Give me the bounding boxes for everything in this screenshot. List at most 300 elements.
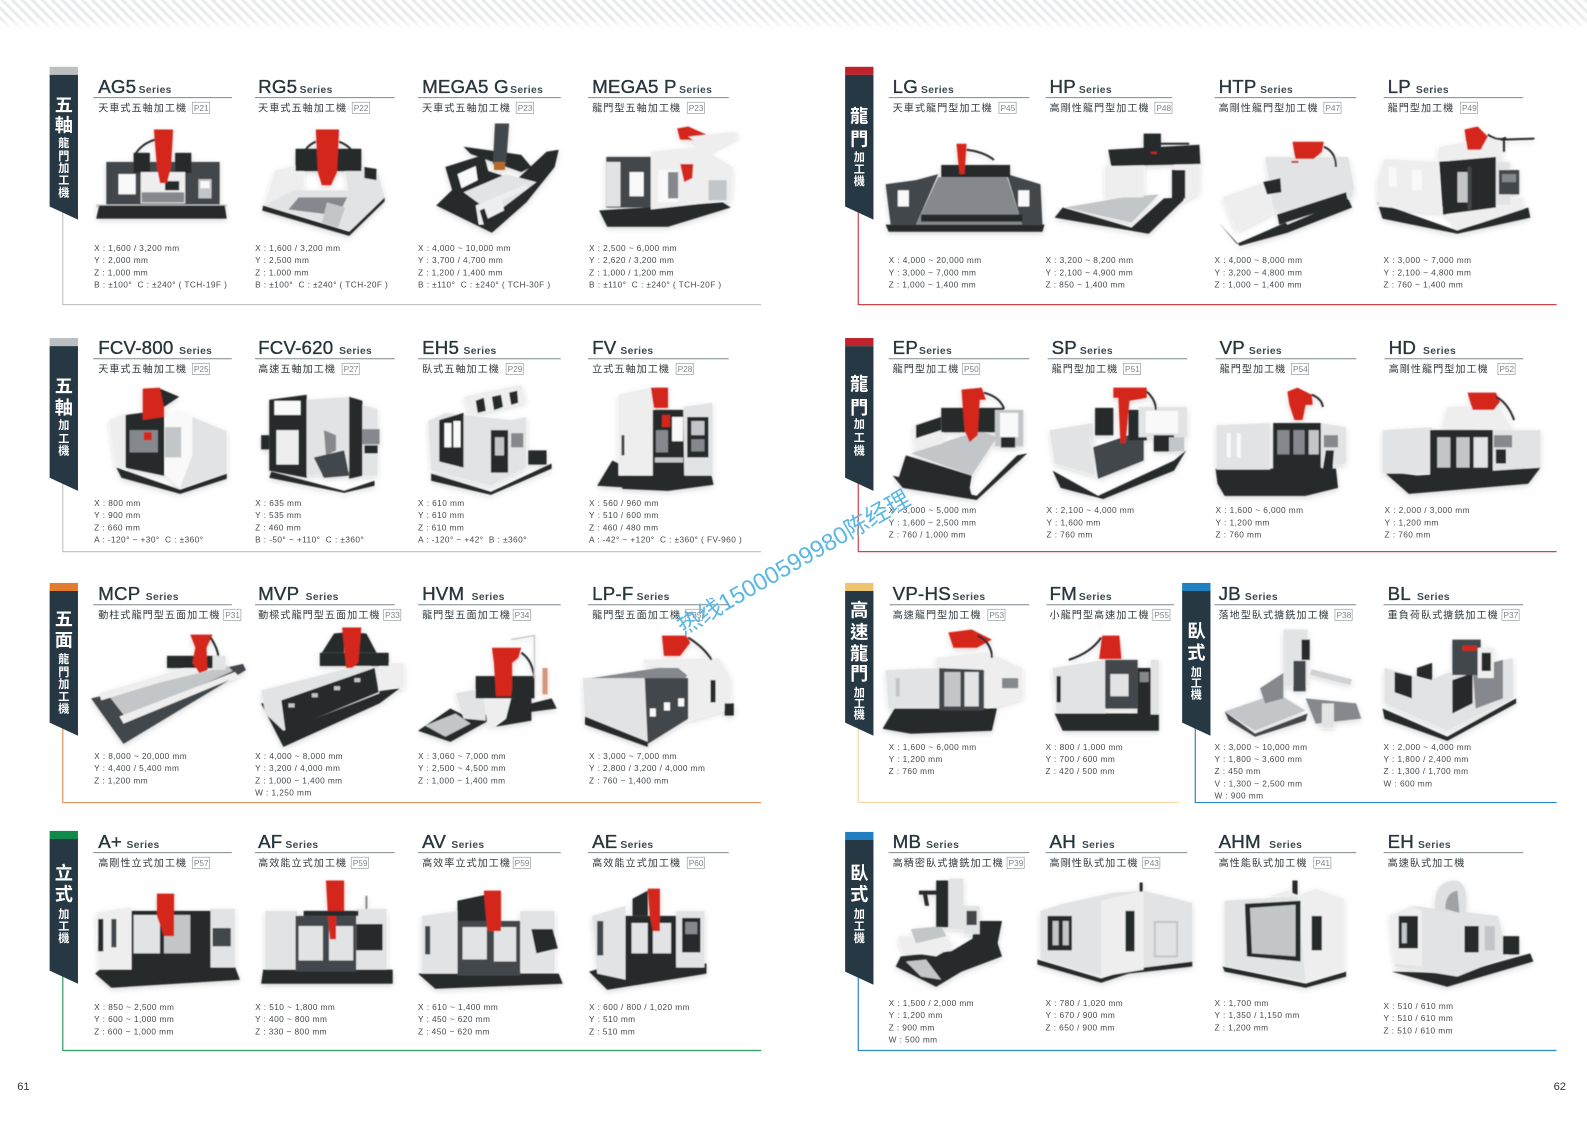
heading: HD: P52	[1499, 364, 1515, 374]
spec text: right row 3: X : 2,000 ~ 4,000 mm	[1384, 742, 1471, 752]
heading: FV: P28	[678, 364, 693, 374]
heading: BL: P37	[1503, 610, 1519, 620]
machine: FCV-620	[261, 395, 380, 493]
spec text: left row 2: X : 610 mm	[418, 498, 465, 508]
ribbon: gantry: 龍	[850, 105, 868, 126]
machine: AG5	[96, 130, 227, 219]
heading: EH5: P29	[508, 364, 523, 374]
spec text: right row 4: Y : 1,200 mm	[889, 1010, 943, 1020]
ribbon: five-face: 機	[58, 702, 69, 716]
page number: 61: 61	[17, 1081, 30, 1093]
panel: right row 4 horizontal	[17, 243, 1566, 1093]
heading: EP	[889, 337, 1029, 375]
heading: MVP: MVP	[258, 583, 299, 604]
machine: RG5	[262, 130, 385, 236]
heading: AG5: 天車式五軸加工機	[98, 101, 187, 114]
heading: FCV-620: Series	[339, 346, 372, 357]
heading: AHM: AHM	[1219, 831, 1261, 852]
spec text: left row 3: X : 8,000 ~ 20,000 mm	[94, 751, 187, 761]
heading: SP: 龍門型加工機	[1052, 362, 1118, 375]
spec text: right row 4: Z : 900 mm	[889, 1022, 935, 1032]
heading: BL: Series	[1417, 592, 1450, 603]
spec text: right row 2: X : 3,000 ~ 5,000 mm	[889, 505, 977, 515]
heading: EH5: Series	[464, 346, 497, 357]
ribbon: gantry: 門	[850, 398, 868, 418]
heading: VP	[1216, 337, 1356, 375]
heading: FCV-800: Series	[179, 346, 212, 357]
heading: HVM: P34	[515, 610, 530, 620]
heading: AH: Series	[1082, 840, 1115, 851]
heading: BL: 重負荷臥式搪銑加工機	[1388, 608, 1499, 621]
spec text: left row 2: X : 800 mm	[94, 498, 141, 508]
ribbon: gantry: 工	[854, 164, 865, 176]
spec text: left row 1: Y : 2,500 mm	[255, 255, 309, 265]
spec text: left row 3: Y : 2,500 ~ 4,500 mm	[418, 763, 506, 773]
heading: LP-F	[588, 583, 729, 621]
ribbon: high speed gantry: 機	[854, 708, 865, 722]
heading: MEGA5 G: MEGA5 G	[422, 76, 509, 97]
heading: LG: LG	[893, 76, 918, 97]
heading: HP	[1046, 76, 1172, 114]
heading: HD	[1385, 337, 1523, 375]
spec text: left row 2: Z : 660 mm	[94, 522, 140, 532]
heading: LP-F: 龍門型五面加工機	[592, 608, 681, 621]
heading: VP: P54	[1293, 364, 1308, 374]
machine: MVP	[261, 627, 404, 747]
heading: RG5: 天車式五軸加工機	[258, 101, 347, 114]
ribbon: vertical: 工	[58, 921, 69, 933]
spec text: right row 2: Z : 760 mm	[1047, 529, 1093, 539]
heading: VP-HS: VP-HS	[893, 583, 951, 604]
heading: EP: P50	[964, 364, 979, 374]
spec text: left row 3: X : 3,000 ~ 7,000 mm	[589, 751, 677, 761]
heading: AH: AH	[1050, 831, 1076, 852]
spec text: right row 3: W : 900 mm	[1215, 791, 1263, 801]
ribbon: gantry: 工	[854, 432, 865, 444]
spec text: left row 4: Y : 400 ~ 800 mm	[255, 1014, 327, 1024]
ribbon: gantry	[845, 338, 873, 491]
heading: RG5	[255, 76, 395, 114]
ribbon: five-axis: 軸	[55, 398, 73, 418]
heading: HTP: Series	[1260, 85, 1293, 96]
heading: VP-HS	[890, 583, 1029, 621]
ribbon: five-axis: 五	[55, 377, 73, 397]
heading: LP-F: P35	[687, 610, 702, 620]
heading: VP: Series	[1249, 346, 1282, 357]
heading: AH	[1046, 831, 1187, 869]
machine: VP-HS	[883, 630, 1022, 734]
heading: FM: 小龍門型高速加工機	[1050, 608, 1150, 621]
machine: LG	[886, 144, 1044, 232]
heading: SP	[1048, 337, 1187, 375]
heading: MEGA5 G: Series	[510, 85, 543, 96]
heading: VP-HS: P53	[989, 610, 1004, 620]
spec text: left row 4: Z : 600 ~ 1,000 mm	[94, 1026, 174, 1036]
spec text: left row 1	[94, 243, 722, 289]
spec text: left row 1: Z : 1,000 / 1,200 mm	[589, 267, 674, 277]
spec text: left row 1: B : ±100° C : ±240° ( TCH-19F )	[94, 279, 227, 289]
heading: MB: MB	[893, 831, 921, 852]
heading: FCV-800: 天車式五軸加工機	[98, 362, 187, 375]
machine: LP-F	[583, 636, 734, 747]
heading: FCV-620: P27	[344, 364, 359, 374]
ribbon: vertical: 式	[55, 885, 73, 905]
spec text: left row 2: Y : 510 / 600 mm	[589, 510, 659, 520]
machine: LP	[1377, 127, 1534, 234]
ribbon: high speed gantry: 龍	[850, 643, 868, 664]
ribbon: five-axis gantry	[50, 67, 78, 220]
heading: EH5	[418, 337, 561, 375]
spec text: left row 4: Y : 510 mm	[589, 1014, 636, 1024]
ribbon: five-axis gantry: 機	[58, 185, 69, 199]
heading: A+: P57	[194, 858, 209, 868]
spec text: right row 3: Y : 1,200 mm	[889, 754, 943, 764]
heading: HP: HP	[1050, 76, 1076, 97]
spec text: right row 3: Z : 760 mm	[889, 766, 935, 776]
spec text: left row 1: B : ±110° C : ±240° ( TCH-30F )	[418, 279, 551, 289]
panel: right row 3 high speed gantry	[17, 243, 1566, 1093]
spec text: right row 1: X : 3,000 ~ 7,000 mm	[1384, 255, 1471, 265]
spec text: left row 1: X : 4,000 ~ 10,000 mm	[418, 243, 511, 253]
heading: AG5: AG5	[98, 76, 136, 97]
heading: MB	[889, 831, 1029, 869]
spec text: right row 4: X : 1,500 / 2,000 mm	[889, 998, 974, 1008]
heading: LP-F: Series	[637, 592, 670, 603]
spec text: left row 2: Y : 535 mm	[255, 510, 302, 520]
heading: A+: Series	[127, 840, 160, 851]
machine: AH	[1037, 883, 1192, 983]
ribbon: high speed gantry: 速	[850, 622, 868, 643]
heading: HP: P48	[1156, 103, 1171, 113]
machine: VP	[1216, 388, 1346, 496]
ribbon: horizontal: 機	[854, 931, 865, 945]
spec text: left row 2: Z : 610 mm	[418, 522, 464, 532]
heading: VP-HS: Series	[952, 592, 985, 603]
spec text: left row 3: Y : 2,800 / 3,200 / 4,000 mm	[589, 763, 705, 773]
spec text: right row 3: X : 1,600 ~ 6,000 mm	[889, 742, 977, 752]
heading: LP	[1384, 76, 1523, 114]
heading: AE: AE	[592, 831, 617, 852]
ribbon: horizontal: 式	[850, 885, 868, 905]
heading: AG5	[93, 76, 232, 114]
spec text: left row 3: Z : 1,000 ~ 1,400 mm	[255, 775, 343, 785]
heading: AG5: Series	[139, 85, 172, 96]
heading: AHM: P41	[1315, 858, 1330, 868]
spec text: left row 2: B : -50° ~ +110° C : ±360°	[255, 534, 364, 544]
spec text: left row 3: X : 4,000 ~ 8,000 mm	[255, 751, 343, 761]
spec text: left row 1: Z : 1,200 / 1,400 mm	[418, 267, 503, 277]
heading: HTP: HTP	[1219, 76, 1257, 97]
spec text: right row 2: Z : 760 mm	[1216, 529, 1262, 539]
heading: A+	[93, 831, 232, 869]
spec text: right row 1	[889, 255, 1471, 289]
spec text: right row 4: X : 780 / 1,020 mm	[1046, 998, 1123, 1008]
heading: JB	[1215, 583, 1356, 621]
heading: AG5: P21	[194, 103, 209, 113]
heading: EP: Series	[919, 346, 952, 357]
heading: MEGA5 P: 龍門型五軸加工機	[592, 101, 681, 114]
machine: MB	[896, 878, 1002, 987]
heading: FM: P55	[1154, 610, 1169, 620]
panel: left row 4 vertical	[17, 243, 1566, 1093]
heading: JB: 落地型臥式搪銑加工機	[1219, 608, 1330, 621]
heading: EP: 龍門型加工機	[893, 362, 959, 375]
heading: MB: Series	[926, 840, 959, 851]
ribbon: five-axis gantry: 軸	[55, 116, 73, 136]
spec text: left row 3	[94, 751, 705, 797]
spec text: right row 2: X : 2,100 ~ 4,000 mm	[1047, 505, 1134, 515]
spec text: right row 4: Y : 1,350 / 1,150 mm	[1215, 1010, 1300, 1020]
heading: FCV-620: FCV-620	[258, 337, 333, 358]
heading: EH5: 臥式五軸加工機	[422, 362, 500, 375]
spec text: left row 4	[94, 1002, 690, 1036]
machine: A+	[95, 894, 240, 988]
heading: HTP: P47	[1325, 103, 1340, 113]
spec text: right row 4: Z : 510 / 610 mm	[1384, 1025, 1453, 1035]
ribbon: horizontal boring: 加	[1191, 665, 1202, 679]
machine: HTP	[1219, 142, 1354, 246]
machine: HD	[1383, 393, 1540, 494]
spec text: left row 4: Z : 510 mm	[589, 1026, 635, 1036]
heading: HVM	[418, 583, 561, 621]
heading: MEGA5 G: P23	[518, 103, 533, 113]
spec text: right row 3: Y : 700 / 600 mm	[1046, 754, 1115, 764]
heading: LP-F: LP-F	[592, 583, 633, 604]
ribbon: vertical: 加	[58, 907, 69, 921]
heading: AF: AF	[258, 831, 282, 852]
heading: LG: P45	[1000, 103, 1016, 113]
heading: HTP: 高剛性龍門型加工機	[1219, 101, 1319, 114]
machine: JB	[1225, 630, 1361, 737]
heading: AHM: 高性能臥式加工機	[1219, 856, 1308, 869]
ribbon: five-axis gantry: 五	[55, 95, 73, 115]
ribbon: horizontal: 加	[854, 907, 865, 921]
spec text: right row 2	[889, 505, 1470, 539]
spec text: left row 1: X : 1,600 / 3,200 mm	[94, 243, 180, 253]
spec text: left row 3: Z : 1,200 mm	[94, 775, 148, 785]
panel: left row 2 five-axis	[17, 243, 1566, 1093]
heading: HTP	[1215, 76, 1356, 114]
spec text: right row 1: Z : 850 ~ 1,400 mm	[1046, 279, 1125, 289]
heading: FV: FV	[592, 337, 617, 358]
machine: MCP	[91, 635, 246, 744]
heading: MVP: P33	[385, 610, 400, 620]
ribbon: gantry	[845, 67, 873, 220]
spec text: right row 3: V : 1,300 ~ 2,500 mm	[1215, 778, 1302, 788]
spec text: right row 4: X : 1,700 mm	[1215, 998, 1269, 1008]
spec text: left row 1: B : ±100° C : ±240° ( TCH-20F )	[255, 279, 388, 289]
ribbon: five-axis: 機	[58, 443, 69, 457]
spec text: left row 2	[94, 498, 742, 544]
ribbon: five-axis: 工	[58, 433, 69, 445]
spec text: right row 4: Y : 510 / 610 mm	[1384, 1013, 1453, 1023]
spec text: right row 2: Y : 1,200 mm	[1216, 517, 1270, 527]
spec text: left row 2: A : -120° ~ +42° B : ±360°	[418, 534, 527, 544]
machine: AF	[261, 881, 393, 984]
spec text: left row 4: X : 510 ~ 1,800 mm	[255, 1002, 335, 1012]
heading: AV: AV	[422, 831, 446, 852]
heading: VP-HS: 高速龍門型加工機	[893, 608, 982, 621]
ribbon: horizontal boring: 臥	[1187, 622, 1206, 642]
ribbon: gantry: 加	[854, 417, 865, 431]
heading: FCV-620: 高速五軸加工機	[258, 362, 336, 375]
spec text: left row 1: Z : 1,000 mm	[255, 267, 309, 277]
machine: HP	[1055, 134, 1200, 234]
spec text: right row 2: Z : 760 / 1,000 mm	[889, 529, 966, 539]
heading: FV	[588, 337, 729, 375]
ribbon: gantry: 加	[854, 150, 865, 164]
spec text: right row 2: Y : 1,200 mm	[1385, 517, 1439, 527]
heading: HVM: Series	[472, 592, 505, 603]
spec text: right row 1: Y : 2,100 ~ 4,800 mm	[1384, 267, 1471, 277]
heading: FV: Series	[620, 346, 654, 357]
machine: AV	[418, 891, 563, 989]
spec text: left row 4: X : 610 ~ 1,400 mm	[418, 1002, 498, 1012]
heading: EH: 高速臥式加工機	[1388, 856, 1465, 869]
spec text: right row 2: Y : 1,600 ~ 2,500 mm	[889, 517, 976, 527]
spec text: left row 3: Z : 760 ~ 1,400 mm	[589, 775, 669, 785]
ribbon: five-axis gantry: 龍	[58, 136, 69, 150]
ribbon: gantry: 機	[854, 443, 865, 457]
heading: HP: Series	[1079, 85, 1112, 96]
spec text: left row 1: X : 1,600 / 3,200 mm	[255, 243, 340, 253]
heading: MCP	[93, 583, 241, 621]
heading: MEGA5 P: P23	[689, 103, 704, 113]
spec text: left row 4: Y : 450 ~ 620 mm	[418, 1014, 490, 1024]
spec text: right row 1: Z : 1,000 ~ 1,400 mm	[1215, 279, 1302, 289]
spec text: right row 4: Z : 650 / 900 mm	[1046, 1022, 1115, 1032]
ribbon: five-axis: 加	[58, 418, 69, 432]
heading: SP: SP	[1052, 337, 1077, 358]
heading: MEGA5 G	[418, 76, 561, 114]
heading: RG5: RG5	[258, 76, 297, 97]
heading: VP: 龍門型加工機	[1220, 362, 1286, 375]
heading: BL	[1384, 583, 1523, 621]
ribbon: five-face: 加	[58, 677, 69, 691]
heading: FV: 立式五軸加工機	[592, 362, 670, 375]
heading: MVP: Series	[306, 592, 339, 603]
heading: HD: Series	[1423, 346, 1456, 357]
heading: SP: Series	[1080, 346, 1113, 357]
spec text: right row 1: Y : 2,100 ~ 4,900 mm	[1046, 267, 1133, 277]
watermark: 热线15000599980陈经理	[673, 485, 915, 641]
spec text: left row 1: B : ±110° C : ±240° ( TCH-20F )	[589, 279, 722, 289]
machine: BL	[1383, 640, 1516, 741]
heading: AH: P43	[1144, 858, 1159, 868]
heading: FCV-620	[255, 337, 395, 375]
ribbon: horizontal boring: 式	[1187, 643, 1205, 663]
spec text: right row 1: Z : 1,000 ~ 1,400 mm	[889, 279, 976, 289]
heading: MVP	[255, 583, 401, 621]
machine: SP	[1050, 388, 1187, 499]
spec text: left row 1: Y : 2,620 / 3,200 mm	[589, 255, 674, 265]
spec text: left row 3: Z : 1,000 ~ 1,400 mm	[418, 775, 505, 785]
ribbon: high speed gantry: 工	[854, 698, 865, 710]
spec text: right row 2: Y : 1,600 mm	[1047, 517, 1101, 527]
ribbon: gantry: 門	[850, 130, 868, 150]
heading: AH: 高剛性臥式加工機	[1050, 856, 1139, 869]
spec text: left row 2: X : 560 / 960 mm	[589, 498, 659, 508]
spec text: left row 3: Y : 3,200 / 4,000 mm	[255, 763, 340, 773]
spec text: right row 2: X : 2,000 / 3,000 mm	[1385, 505, 1470, 515]
ribbon: horizontal boring: 機	[1191, 687, 1202, 701]
heading: JB: P38	[1336, 610, 1352, 620]
spec text: left row 2: X : 635 mm	[255, 498, 302, 508]
spec text: left row 3: W : 1,250 mm	[255, 787, 312, 797]
spec text: left row 1: Z : 1,000 mm	[94, 267, 148, 277]
heading: AF	[255, 831, 395, 869]
heading: EP: EP	[893, 337, 918, 358]
heading: EH	[1384, 831, 1523, 869]
panel: right row 3 horizontal boring	[17, 243, 1566, 1093]
spec text: right row 3: Y : 1,800 / 2,400 mm	[1384, 754, 1469, 764]
heading: SP: P51	[1125, 364, 1140, 374]
spec text: left row 4: X : 600 / 800 / 1,020 mm	[589, 1002, 690, 1012]
machine: FCV-800	[109, 388, 227, 494]
heading: FCV-800	[93, 337, 232, 375]
panel: right row 2 gantry	[17, 243, 1566, 1093]
spec text: right row 1: X : 4,000 ~ 20,000 mm	[889, 255, 982, 265]
spec text: left row 4: X : 850 ~ 2,500 mm	[94, 1002, 174, 1012]
spec text: right row 3: Z : 450 mm	[1215, 766, 1261, 776]
ribbon: high speed gantry: 門	[850, 664, 868, 684]
heading: HD: 高剛性龍門型加工機	[1389, 362, 1489, 375]
heading: MCP: 動柱式龍門型五面加工機	[98, 608, 221, 621]
spec text: right row 2: X : 1,600 ~ 6,000 mm	[1216, 505, 1303, 515]
ribbon: five-axis gantry: 工	[58, 175, 69, 187]
heading: LP: Series	[1416, 85, 1449, 96]
heading: AV: P59	[515, 858, 530, 868]
heading: HP: 高剛性龍門型加工機	[1050, 101, 1150, 114]
heading: HD: HD	[1389, 337, 1416, 358]
heading: AE: Series	[620, 840, 654, 851]
spec text: right row 4	[889, 998, 1453, 1044]
ribbon: horizontal: 臥	[850, 863, 869, 883]
heading: MEGA5 P: Series	[679, 85, 712, 96]
heading: AV: 高效率立式加工機	[422, 856, 511, 869]
spec text: right row 3: X : 3,000 ~ 10,000 mm	[1215, 742, 1307, 752]
spec text: right row 3: Z : 1,300 / 1,700 mm	[1384, 766, 1468, 776]
spec text: left row 2: Z : 460 / 480 mm	[589, 522, 658, 532]
spec text: right row 1: Y : 3,200 ~ 4,800 mm	[1215, 267, 1302, 277]
spec text: right row 4: Y : 670 / 900 mm	[1046, 1010, 1115, 1020]
heading: BL: BL	[1388, 583, 1411, 604]
heading: LG: Series	[921, 85, 954, 96]
heading: AHM	[1215, 831, 1356, 869]
heading: MCP: MCP	[98, 583, 140, 604]
heading: MB: 高精密臥式搪銑加工機	[893, 856, 1004, 869]
heading: MCP: P31	[225, 610, 240, 620]
spec text: right row 1: Z : 760 ~ 1,400 mm	[1384, 279, 1463, 289]
spec text: left row 2: A : -42° ~ +120° C : ±360° ( FV-960 )	[589, 534, 742, 544]
machine: FM	[1053, 636, 1159, 731]
heading: AHM: Series	[1269, 840, 1302, 851]
machine: EH	[1390, 881, 1533, 987]
ribbon: horizontal boring	[1182, 583, 1210, 736]
spec text: right row 3: W : 600 mm	[1384, 778, 1432, 788]
machine: EP	[893, 388, 1027, 500]
heading: JB: JB	[1219, 583, 1241, 604]
heading: FCV-800: FCV-800	[98, 337, 174, 358]
heading: VP: VP	[1220, 337, 1245, 358]
heading: AV	[418, 831, 561, 869]
heading: LP: LP	[1388, 76, 1411, 97]
ribbon: five-face: 五	[55, 609, 73, 629]
spec text: left row 1: Y : 2,000 mm	[94, 255, 148, 265]
ribbon: five-face: 面	[55, 631, 73, 651]
ribbon: high speed gantry: 加	[854, 685, 865, 699]
ribbon: five-face: 門	[58, 666, 69, 679]
